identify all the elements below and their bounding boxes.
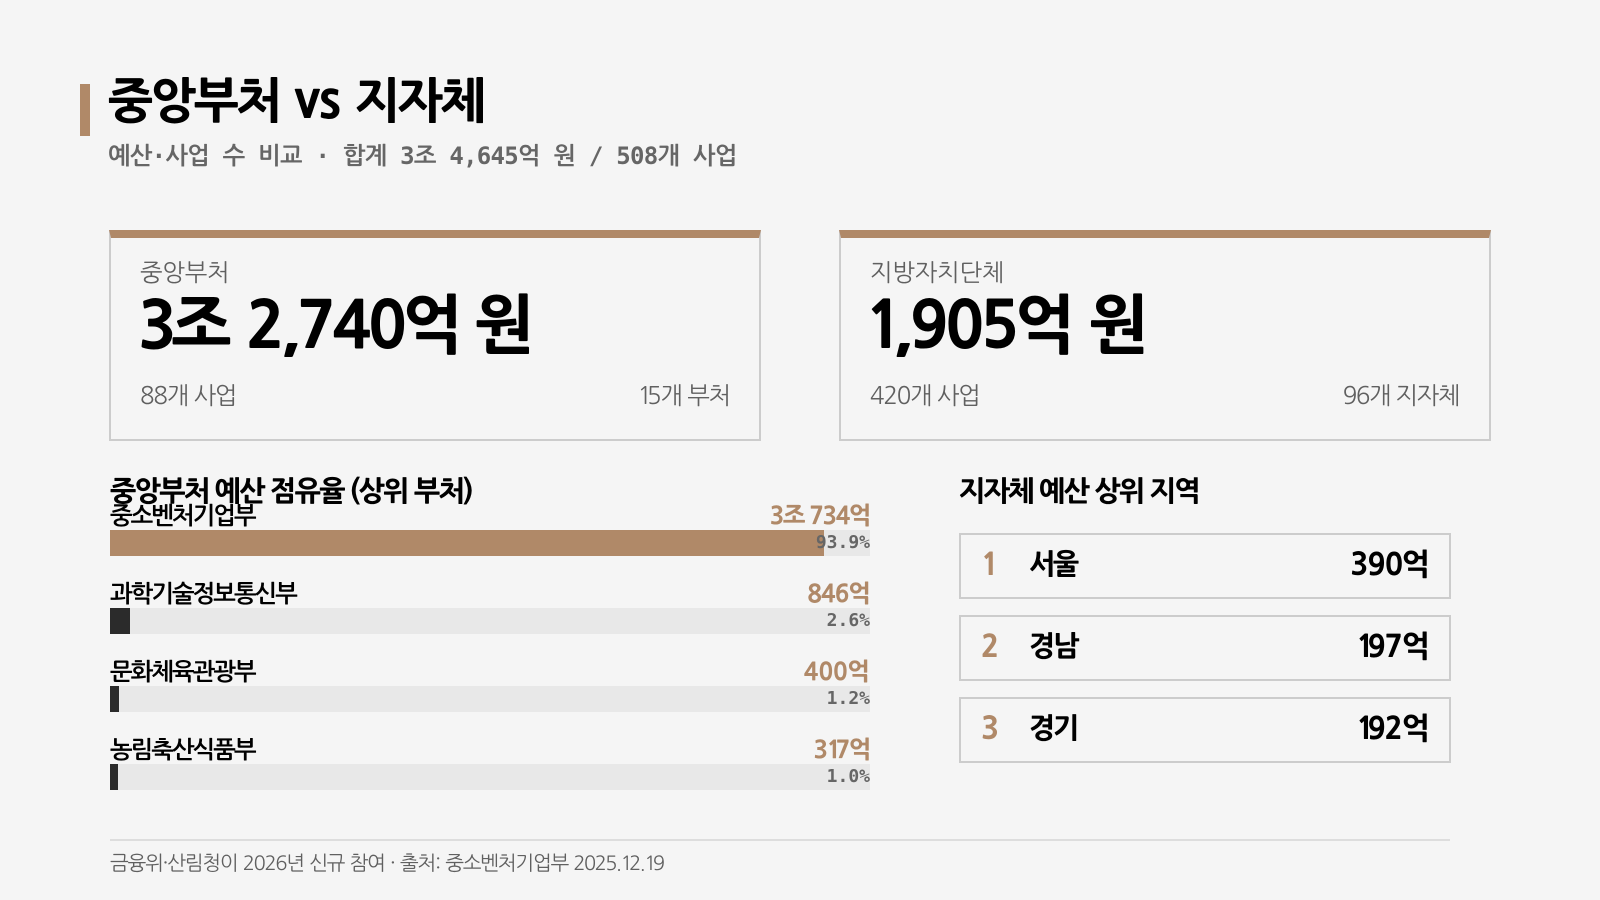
card agency count: 96개 지자체 (1343, 384, 1459, 408)
bar: ministry 2 (110, 608, 870, 634)
title: 중앙부처 vs 지자체 (108, 74, 484, 126)
bar: ministry 3: 1.2% (827, 688, 870, 709)
amount: ministry 1: 3조 734억 (770, 504, 870, 528)
bar: ministry 4: 1.0% (827, 766, 870, 787)
region amount: 197억 (1356, 632, 1429, 662)
panel: region 3 (959, 697, 1451, 763)
bar chart: ministry share (110, 504, 870, 790)
rank: 2 (981, 632, 999, 662)
panel: region 1 (959, 533, 1451, 599)
bar: ministry 1 (110, 530, 870, 556)
title block (80, 74, 737, 170)
card value: 3조 2,740억 원 (138, 294, 531, 358)
panel: local government card (839, 230, 1491, 441)
heading: top regions: 지자체 예산 상위 지역 (959, 478, 1199, 506)
bar: ministry 4 (110, 764, 870, 790)
panel: region 2 (959, 615, 1451, 681)
bar: ministry 1: 93.9% (816, 532, 870, 553)
region name: 서울 (1029, 551, 1077, 579)
region amount: 192억 (1356, 714, 1429, 744)
card value: 1,905억 원 (865, 294, 1146, 358)
label: ministry 3: 문화체육관광부 (110, 660, 255, 684)
bar: ministry 3 (110, 686, 870, 712)
amount: ministry 4: 317억 (813, 738, 870, 762)
region amount: 390억 (1350, 550, 1429, 580)
card label: 중앙부처 (140, 261, 229, 285)
label: ministry 4: 농림축산식품부 (110, 738, 255, 762)
amount: ministry 2: 846억 (807, 582, 870, 606)
amount: ministry 3: 400억 (804, 660, 870, 684)
rank: 1 (981, 550, 999, 580)
subtitle: 예산·사업 수 비교 · 합계 3조 4,645억 원 / 508개 사업 (108, 142, 737, 170)
footer line (110, 839, 1450, 841)
region name: 경남 (1029, 633, 1077, 661)
accent bar (80, 84, 90, 136)
card label: 지방자치단체 (870, 261, 1004, 285)
rank: 3 (981, 714, 999, 744)
panel: central government card (109, 230, 761, 441)
card agency count: 15개 부처 (638, 384, 730, 408)
heading: ministry share: 중앙부처 예산 점유율 (상위 부처) (110, 478, 472, 506)
label: ministry 1: 중소벤처기업부 (110, 504, 255, 528)
card project count: 88개 사업 (140, 384, 236, 408)
card project count: 420개 사업 (870, 384, 980, 408)
bar: ministry 2: 2.6% (827, 610, 870, 631)
footer source note: 금융위·산림청이 2026년 신규 참여 · 출처: 중소벤처기업부 2025.12.19 (110, 853, 664, 873)
label: ministry 2: 과학기술정보통신부 (110, 582, 296, 606)
region name: 경기 (1029, 715, 1077, 743)
